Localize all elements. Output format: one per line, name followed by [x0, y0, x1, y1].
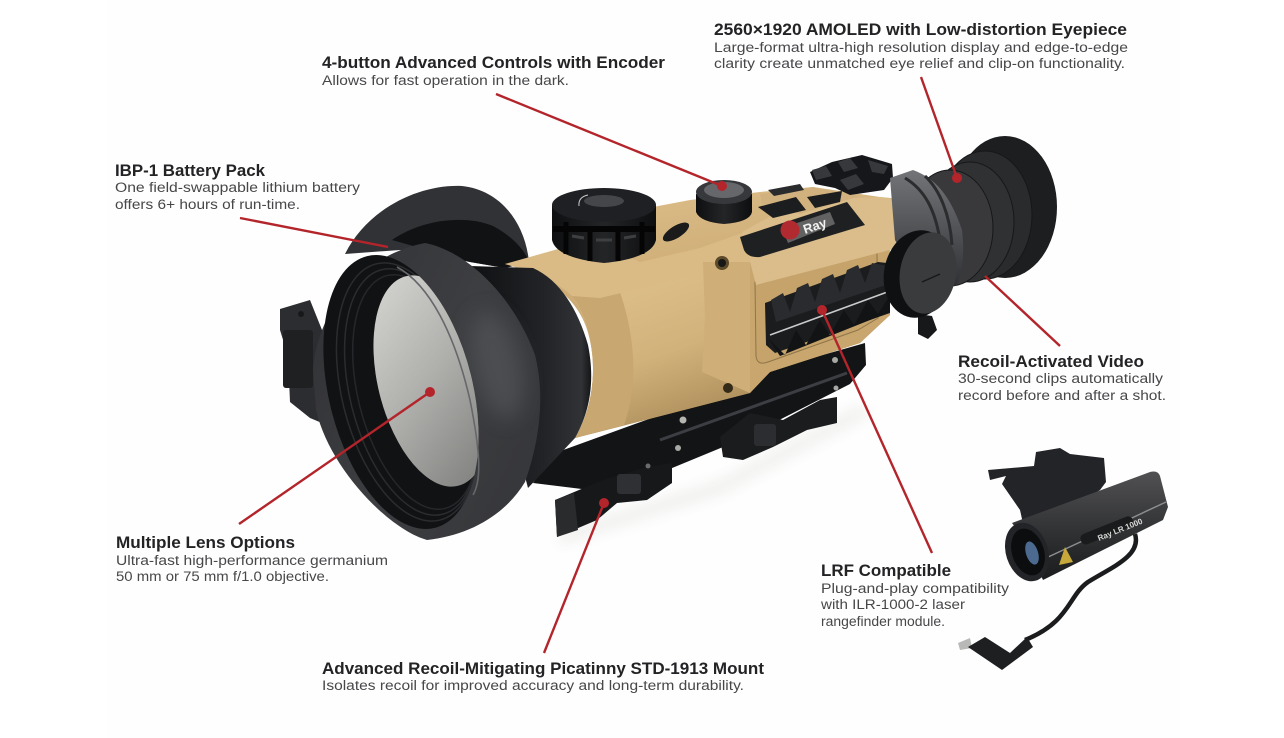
callout: mount: Isolates recoil for improved accuracy and long-term durability.: [322, 678, 744, 693]
brand plate: Ray: [801, 215, 829, 237]
rubber eyecup: [907, 136, 1057, 286]
callout: mount: [322, 660, 765, 693]
rear lever: [720, 397, 837, 460]
riflescope illustration: [280, 136, 1057, 545]
callout: lens: Ultra-fast high-performance germanium: [116, 553, 388, 568]
callout: lens: Multiple Lens Options: [116, 534, 295, 552]
main tube: [572, 258, 753, 438]
leader: video: [985, 276, 1060, 346]
callout: video: 30-second clips automatically: [958, 371, 1163, 386]
callout: eyepiece: 2560×1920 AMOLED with Low-distortion Eyepiece: [714, 21, 1127, 39]
callout: lens: [116, 534, 388, 584]
side picatinny rail: [765, 262, 890, 356]
callout: lens: 50 mm or 75 mm f/1.0 objective.: [116, 569, 329, 584]
callout: LRF: [820, 562, 1009, 629]
front opening: [297, 239, 505, 545]
callout: video: record before and after a shot.: [958, 388, 1166, 403]
germanium lens: [373, 275, 479, 487]
laser warning: [1059, 547, 1073, 565]
callout: battery: offers 6+ hours of run-time.: [115, 197, 300, 212]
label: [1079, 515, 1144, 546]
clamp: [988, 448, 1106, 530]
callout: mount: Advanced Recoil-Mitigating Picatinny STD-1913 Mount: [322, 660, 765, 678]
leader: eyepiece: [921, 77, 957, 178]
callout: LRF: LRF Compatible: [821, 562, 951, 580]
objective neck: [470, 266, 591, 488]
callout: LRF: rangefinder module.: [821, 614, 945, 629]
leader: battery: [240, 218, 388, 247]
eyepiece collar: [890, 170, 963, 292]
cable: [1025, 534, 1136, 640]
callout: controls: Allows for fast operation in the dark.: [322, 73, 569, 88]
callout: eyepiece: Large-format ultra-high resolution display and edge-to-edge: [714, 40, 1128, 55]
callout: LRF: Plug-and-play compatibility: [821, 581, 1009, 596]
ground shadow: [560, 405, 870, 545]
front lever: [555, 463, 672, 537]
leader: LRF: [822, 310, 932, 553]
callout: eyepiece: clarity create unmatched eye relief and clip-on functionality.: [714, 56, 1125, 71]
leader: lens: [239, 392, 430, 524]
callout: battery: [115, 162, 360, 212]
tan body: [505, 187, 925, 438]
leader: controls: [496, 94, 722, 186]
leader dots: [425, 173, 962, 508]
small encoder knob: [696, 180, 752, 224]
callout: LRF: with ILR-1000-2 laser: [820, 597, 966, 612]
brand plate: [740, 184, 865, 257]
leader lines: [239, 77, 1060, 653]
callout: battery: IBP-1 Battery Pack: [115, 162, 266, 180]
callout: video: Recoil-Activated Video: [958, 353, 1144, 371]
connector: [968, 637, 1033, 670]
callout: video: [958, 353, 1166, 403]
objective hood: [297, 239, 540, 545]
label: Ray LR 1000: [1096, 516, 1144, 543]
laser rangefinder module: [958, 448, 1168, 670]
body: [1012, 472, 1168, 580]
large elevation knob: [552, 188, 656, 263]
callout: battery: One field-swappable lithium battery: [115, 180, 360, 195]
top rail: [810, 155, 893, 195]
USB-C plug: [958, 638, 972, 650]
leader: mount: [544, 503, 604, 653]
flip cap: [280, 186, 529, 423]
USB cap knob: [877, 225, 963, 339]
picatinny mount: [533, 343, 866, 537]
callout: controls: 4-button Advanced Controls with Encoder: [322, 54, 666, 72]
callout: eyepiece: [714, 21, 1128, 71]
callout: controls: [322, 54, 666, 88]
front lens: [998, 517, 1056, 587]
